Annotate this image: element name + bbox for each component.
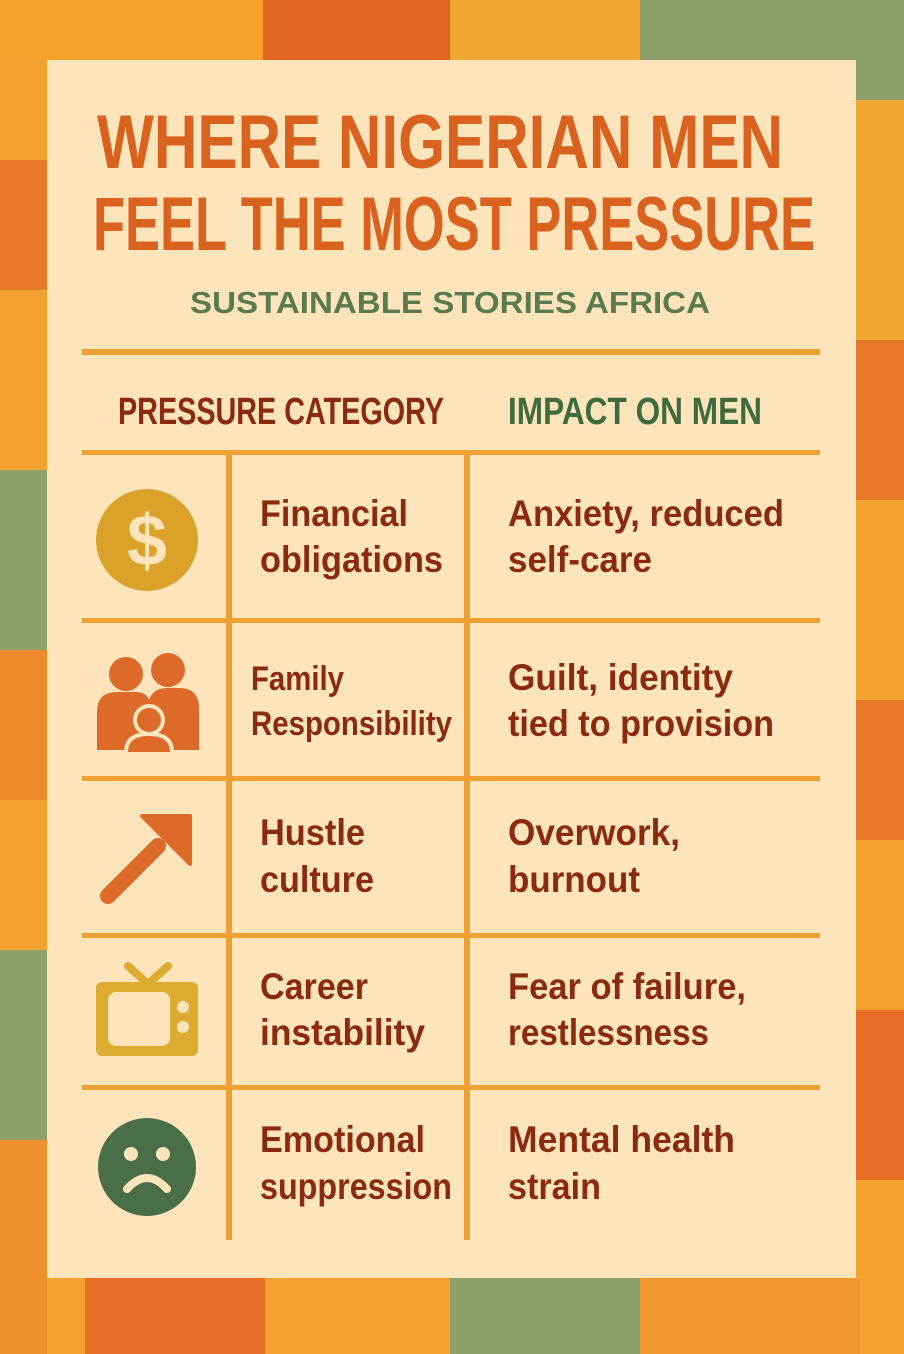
table text: Mental health	[508, 1119, 735, 1160]
icon: tv	[96, 962, 198, 1056]
header: pressure category: PRESSURE CATEGORY	[118, 391, 444, 433]
icon: sad face	[98, 1118, 196, 1216]
table text: Responsibility	[251, 705, 452, 743]
table text: Guilt, identity	[508, 657, 733, 698]
subtitle: SUSTAINABLE STORIES AFRICA	[190, 285, 710, 320]
table text: burnout	[508, 859, 640, 900]
table text: Fear of failure,	[508, 966, 746, 1007]
table text	[251, 493, 784, 1207]
table text: culture	[260, 859, 374, 900]
icon: dollar: $	[127, 501, 167, 581]
table text: Financial	[260, 493, 408, 534]
table text: Overwork,	[508, 812, 680, 853]
header: impact on men: IMPACT ON MEN	[508, 391, 762, 433]
table text: tied to provision	[508, 703, 774, 744]
table text: self-care	[508, 539, 652, 580]
table text: strain	[508, 1166, 601, 1207]
table text: restlessness	[508, 1012, 709, 1053]
icon: family	[97, 653, 199, 752]
table text: Family	[251, 660, 344, 698]
table text: Emotional	[260, 1119, 425, 1160]
table text: obligations	[260, 539, 443, 580]
table text: Career	[260, 966, 368, 1007]
icon: dollar	[96, 489, 198, 591]
table text: instability	[260, 1012, 425, 1053]
table text: suppression	[260, 1166, 452, 1207]
table text: Anxiety, reduced	[508, 493, 784, 534]
title	[93, 100, 815, 267]
table text: Hustle	[260, 812, 365, 853]
icon: arrow	[100, 814, 192, 904]
